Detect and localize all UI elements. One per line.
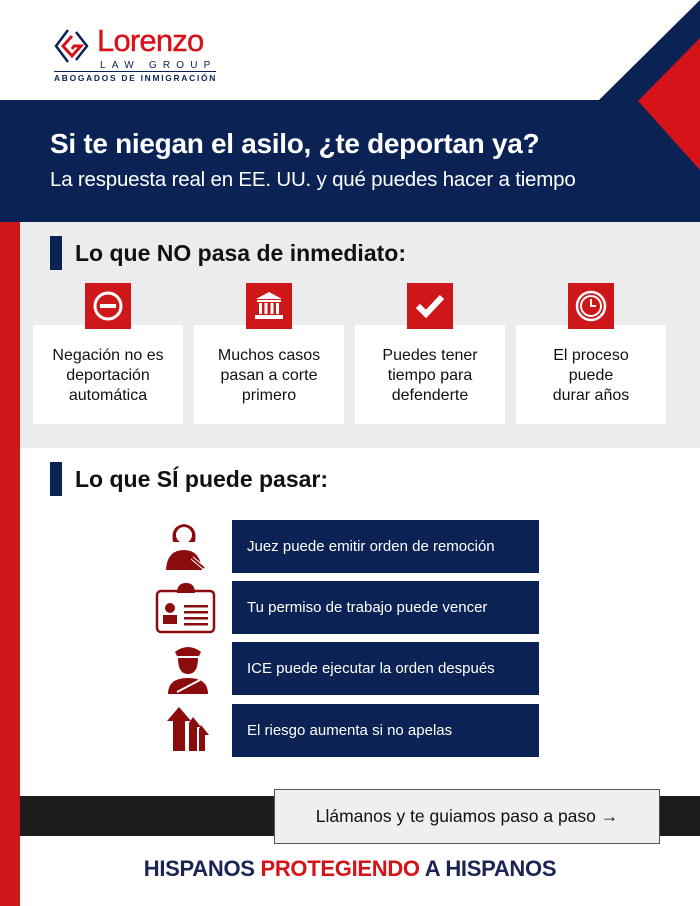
- card 2: [194, 325, 344, 424]
- row 3: [232, 642, 539, 695]
- icon: minus circle: [85, 283, 131, 329]
- CTA button: [274, 789, 660, 844]
- card 4: puede: [569, 367, 613, 384]
- row 1: [232, 520, 539, 573]
- header navy band: [0, 100, 700, 222]
- card 1: [33, 325, 183, 424]
- list: what can happen: [156, 520, 539, 757]
- logo: LAW GROUP: [100, 60, 217, 71]
- card 1: deportación: [66, 367, 150, 384]
- card 2: Muchos casos: [218, 347, 320, 364]
- card 3: tiempo para: [388, 367, 472, 384]
- CTA button: Llámanos y te guiamos paso a paso →: [316, 806, 618, 826]
- card 3: Puedes tener: [382, 347, 478, 364]
- heading SI: Lo que SÍ puede pasar:: [75, 466, 328, 492]
- row 4: [232, 704, 539, 757]
- card 3: [355, 325, 505, 424]
- panel: what does NOT happen: [20, 222, 700, 448]
- heading NO: Lo que NO pasa de inmediato:: [75, 240, 406, 266]
- card 2: pasan a corte: [221, 367, 317, 384]
- subtitle: La respuesta real en EE. UU. y qué puedes hacer a tiempo: [50, 168, 576, 191]
- title: Si te niegan el asilo, ¿te deportan ya?: [50, 128, 539, 159]
- row 1: Juez puede emitir orden de remoción: [247, 538, 495, 555]
- card 3: defenderte: [392, 387, 468, 404]
- icon: check: [407, 283, 453, 329]
- icon: judge: [166, 524, 205, 570]
- row 4: El riesgo aumenta si no apelas: [247, 722, 452, 739]
- row 3: ICE puede ejecutar la orden después: [247, 660, 495, 677]
- black bar: [20, 796, 700, 836]
- card 4: durar años: [553, 387, 629, 404]
- row 2: [232, 581, 539, 634]
- icon: rising arrows: [167, 707, 209, 751]
- card 1: automática: [69, 387, 147, 404]
- icon: clock: [568, 283, 614, 329]
- logo: Lorenzo: [97, 23, 203, 58]
- card 4: El proceso: [553, 347, 629, 364]
- row 2: Tu permiso de trabajo puede vencer: [247, 599, 487, 616]
- logo: ABOGADOS DE INMIGRACIÓN: [54, 73, 217, 83]
- icon: work permit card: [156, 583, 216, 634]
- card 2: primero: [242, 387, 296, 404]
- card 4: [516, 325, 666, 424]
- left red strip: [0, 222, 20, 906]
- heading SI: [50, 462, 328, 496]
- corner decoration: [599, 0, 700, 170]
- logo: [54, 23, 217, 83]
- icon: ICE officer: [168, 647, 208, 694]
- icon: courthouse: [246, 283, 292, 329]
- icon: logo diamond: [54, 29, 88, 63]
- footer tagline: HISPANOS PROTEGIENDO A HISPANOS: [144, 856, 556, 881]
- card 1: Negación no es: [52, 347, 164, 364]
